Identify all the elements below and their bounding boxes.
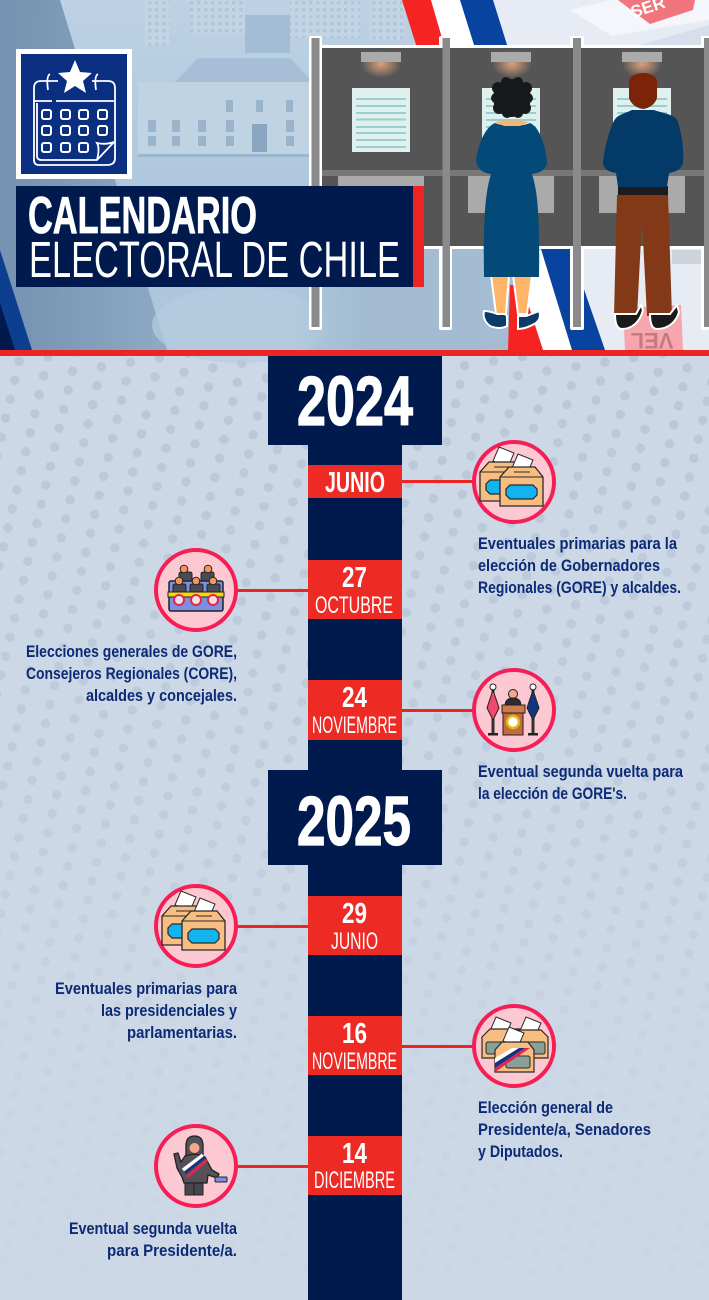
text: eventuales primarias gore: [478, 534, 681, 597]
header photo background: [0, 0, 709, 363]
date: 24 noviembre: [308, 680, 402, 740]
title banner: CALENDARIO: [28, 187, 257, 245]
plaza fountain: [152, 287, 328, 363]
date: 16 noviembre: NOVIEMBRE: [312, 1048, 397, 1075]
calendar icon: [16, 49, 132, 179]
date: 16 noviembre: 16: [342, 1018, 367, 1050]
year 2024: 2024: [297, 362, 413, 440]
timeline column: [236, 356, 474, 1300]
year 2025: [268, 770, 442, 865]
date: 16 noviembre: [308, 1016, 402, 1075]
dark stripes bottom left: [0, 250, 32, 350]
newspaper: VEL: VEL: [631, 328, 673, 353]
text: eleccion general: y Diputados.: [478, 1142, 563, 1161]
text: primarias presidenciales: las presidenciales y: [101, 1001, 237, 1020]
calendar outline: [34, 74, 115, 165]
title banner: ELECTORAL DE CHILE: [29, 231, 400, 288]
date: 29 junio: 29: [342, 898, 367, 930]
post white caps: [309, 36, 709, 330]
date: 29 junio: JUNIO: [331, 928, 378, 955]
text: eleccion general: Presidente/a, Senadores: [478, 1120, 651, 1139]
date: 14 diciembre: DICIEMBRE: [314, 1167, 395, 1194]
voting booths: [309, 36, 709, 330]
date: junio 2024: [308, 465, 402, 499]
date: 24 noviembre: NOVIEMBRE: [312, 712, 397, 739]
newspaper: SER: [618, 0, 695, 24]
text: eventuales primarias gore: elección de Gobernadores: [478, 556, 660, 575]
icon: ballot boxes: [474, 442, 554, 522]
flag stripe top: [402, 0, 508, 48]
text: elecciones generales: Elecciones generales de GORE,: [26, 642, 237, 661]
icon: podium with flags: [474, 670, 554, 750]
booth fixtures: lamps, ballots and shelves: [338, 50, 685, 213]
date: 14 diciembre: [308, 1136, 402, 1195]
date: 27 octubre: 27: [342, 562, 367, 594]
palacio de la moneda backdrop: [138, 0, 405, 157]
year 2025: 2025: [297, 782, 411, 860]
date: junio 2024: JUNIO: [325, 467, 385, 499]
text: segunda vuelta gore: [478, 762, 683, 803]
icon: president with sash: [156, 1126, 236, 1206]
text: eleccion general: [478, 1098, 651, 1161]
dotted page background: [0, 356, 709, 962]
text: elecciones generales: alcaldes y concejales.: [86, 686, 237, 705]
connector lines: [236, 480, 474, 1168]
date: 27 octubre: [308, 560, 402, 619]
date: 27 octubre: OCTUBRE: [315, 592, 393, 619]
flag stripe bottom: [508, 249, 605, 350]
text: primarias presidenciales: parlamentarias.: [127, 1023, 237, 1042]
text: elecciones generales: [26, 642, 237, 705]
text: eleccion general: Elección general de: [478, 1098, 613, 1117]
newspaper: VEL: [623, 305, 683, 353]
text: segunda vuelta presidente: para Presidente/a.: [107, 1241, 237, 1260]
title banner: [16, 186, 424, 288]
date: 24 noviembre: 24: [342, 682, 367, 714]
year 2024: [268, 356, 442, 445]
date: 29 junio: [308, 896, 402, 955]
text: primarias presidenciales: [55, 979, 237, 1042]
text: primarias presidenciales: Eventuales primarias para: [55, 979, 237, 998]
paper backdrop top and bottom right: [460, 0, 709, 48]
woman voter: [476, 77, 547, 329]
icon: ballot boxes 2025: [156, 886, 236, 966]
text: eventuales primarias gore: Eventuales primarias para la: [478, 534, 677, 553]
text: segunda vuelta presidente: Eventual segunda vuelta: [69, 1219, 237, 1238]
star: [58, 60, 92, 93]
text: segunda vuelta gore: la elección de GORE's.: [478, 784, 627, 803]
icon: council: [156, 550, 236, 630]
icon: ballot boxes with flag sash: [474, 1006, 554, 1086]
text: elecciones generales: Consejeros Regionales (CORE),: [26, 664, 237, 683]
header red rule: [0, 350, 709, 356]
date: 14 diciembre: 14: [342, 1138, 367, 1170]
man voter: [603, 73, 683, 329]
text: segunda vuelta presidente: [69, 1219, 237, 1260]
